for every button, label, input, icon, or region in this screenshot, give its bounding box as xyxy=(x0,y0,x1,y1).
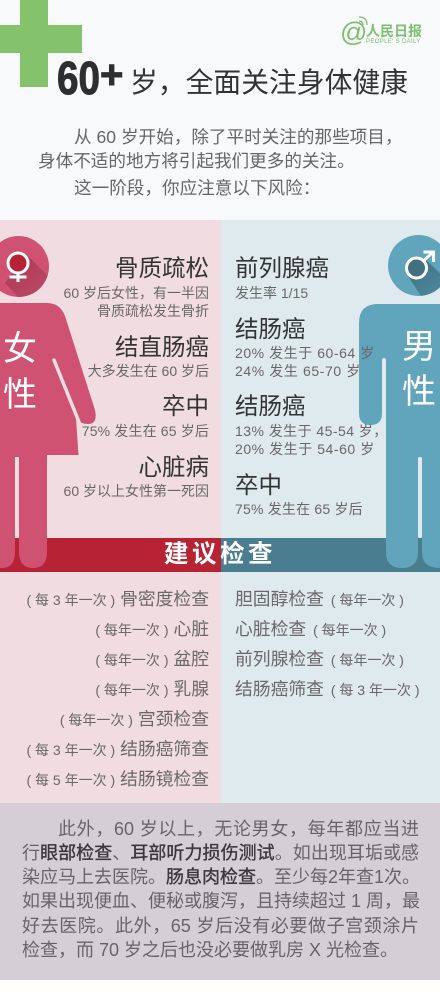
label: female: 性 xyxy=(3,376,37,414)
logo: People's Daily xyxy=(340,16,422,47)
men risks: 卒中 xyxy=(235,472,282,498)
logo: People's Daily: 人民日报 xyxy=(366,23,422,39)
women risks: 大多发生在 60 岁后 xyxy=(88,363,209,379)
women risks: 60 岁以上女性第一死因 xyxy=(64,483,209,499)
male figure xyxy=(359,304,440,568)
band: recommended checks right xyxy=(221,538,440,572)
men risks: 13% 发生于 45-54 岁， xyxy=(235,423,388,439)
icon: green cross xyxy=(0,0,82,87)
panel: women background xyxy=(0,220,221,803)
men risks: 75% 发生在 65 岁后 xyxy=(235,501,363,517)
women checks list: ( 每 3 年一次 ) 骨密度检查 xyxy=(26,589,209,609)
band heading: 建议检查 xyxy=(164,541,276,568)
men risks: 20% 发生于 60-64 岁 xyxy=(235,345,375,361)
men checks list: 结肠癌筛查 ( 每 3 年一次 ) xyxy=(235,679,420,699)
label: male xyxy=(402,328,436,411)
title: + xyxy=(100,53,123,97)
men risks: 前列腺癌 xyxy=(235,255,329,281)
men risks: 结肠癌 xyxy=(235,316,306,342)
women risks: 60 岁后女性，有一半因 xyxy=(64,285,209,301)
women checks list: ( 每年一次 ) 宫颈检查 xyxy=(60,709,209,729)
advice paragraph: 如果出现便血、便秘或腹泻，且持续超过 1 周，最 xyxy=(22,891,420,911)
title: 岁，全面关注身体健康 xyxy=(130,67,408,98)
advice paragraph: 检查，而 70 岁之后也没必要做乳房 X 光检查。 xyxy=(22,940,398,960)
men risks xyxy=(235,255,388,517)
panel: additional advice xyxy=(0,803,440,980)
women risks: 卒中 xyxy=(162,393,209,419)
women risks xyxy=(64,255,209,499)
men risks: 24% 发生 65-70 岁 xyxy=(235,363,361,379)
men risks: 发生率 1/15 xyxy=(235,285,308,301)
men checks list: 胆固醇检查 ( 每年一次 ) xyxy=(235,589,404,609)
band: recommended checks left xyxy=(0,538,221,572)
label: female: 女 xyxy=(3,330,37,368)
intro text xyxy=(38,127,402,198)
title xyxy=(57,52,408,104)
title: 60 xyxy=(57,52,100,104)
intro text: 从 60 岁开始，除了平时关注的那些项目， xyxy=(74,127,402,147)
advice paragraph xyxy=(22,819,420,960)
advice paragraph: 好去医院。此外，65 岁后没有必要做子宫颈涂片 xyxy=(22,916,419,936)
men risks: 20% 发生于 54-60 岁 xyxy=(235,441,375,457)
label: male: 性 xyxy=(402,373,436,411)
women checks list: ( 每年一次 ) 盆腔 xyxy=(95,649,209,669)
icon: female symbol xyxy=(0,236,49,297)
label: male: 男 xyxy=(402,328,436,366)
men checks list: 心脏检查 ( 每年一次 ) xyxy=(235,619,386,639)
women risks: 75% 发生在 65 岁后 xyxy=(82,423,209,439)
women checks list: ( 每年一次 ) 乳腺 xyxy=(95,679,209,699)
men checks list: 前列腺检查 ( 每年一次 ) xyxy=(235,649,404,669)
men checks list xyxy=(235,589,420,699)
female figure xyxy=(0,303,96,568)
advice paragraph: 行眼部检查、耳部听力损伤测试。如出现耳垢或感 xyxy=(22,843,419,863)
logo: People's Daily: @ xyxy=(340,17,367,47)
advice paragraph: 此外，60 岁以上，无论男女，每年都应当进 xyxy=(58,819,419,839)
women risks: 心脏病 xyxy=(138,454,209,480)
logo: People's Daily: PEOPLE' S DAILY xyxy=(366,39,421,45)
header background xyxy=(0,0,440,220)
women checks list xyxy=(26,589,209,789)
advice paragraph: 染应马上去医院。肠息肉检查。至少每2年查1次。 xyxy=(22,867,420,887)
label: female xyxy=(3,330,37,414)
women checks list: ( 每 5 年一次 ) 结肠镜检查 xyxy=(26,769,209,789)
women risks: 骨质疏松发生骨折 xyxy=(97,303,209,319)
intro text: 身体不适的地方将引起我们更多的关注。 xyxy=(38,151,355,171)
men risks: 结肠癌 xyxy=(235,393,306,419)
women checks list: ( 每年一次 ) 心脏 xyxy=(95,619,209,639)
women risks: 骨质疏松 xyxy=(115,255,209,281)
intro text: 这一阶段，你应注意以下风险： xyxy=(74,178,320,198)
panel: men background xyxy=(221,220,440,803)
women risks: 结直肠癌 xyxy=(115,334,209,360)
women checks list: ( 每 3 年一次 ) 结肠癌筛查 xyxy=(26,739,209,759)
icon: male symbol xyxy=(388,235,440,296)
